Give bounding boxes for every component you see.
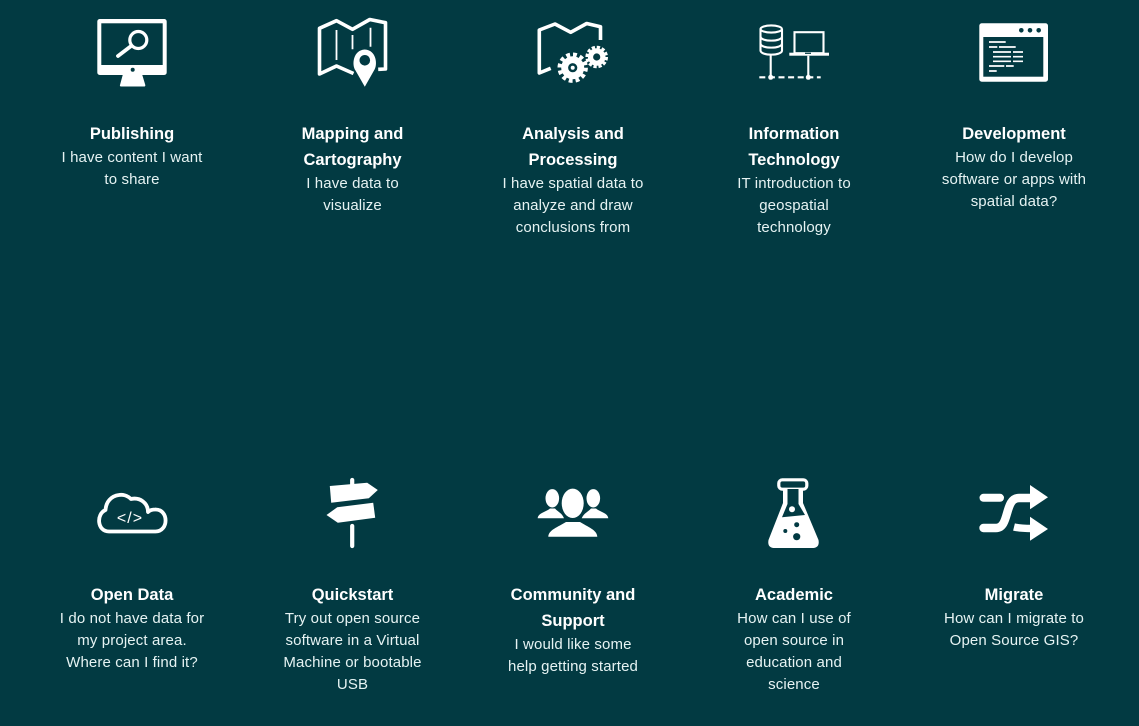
panel: Analysis and Processing	[502, 22, 644, 236]
text: Quickstart: Try out open source	[285, 610, 420, 627]
text: Development: Development	[962, 125, 1066, 143]
text: Analysis and Processing: I have spatial data to	[502, 175, 644, 192]
icon: map with gears	[538, 22, 608, 83]
text: Community and Support: I would like some	[514, 636, 632, 653]
panel: Community and Support	[508, 488, 638, 675]
icon: lab flask	[768, 478, 819, 548]
icon: crossing arrows	[979, 485, 1048, 541]
text: Information Technology: Information	[749, 125, 839, 143]
text: Quickstart: Machine or bootable	[283, 654, 422, 671]
text: Community and Support: help getting started	[508, 658, 638, 675]
panel: Migrate	[944, 485, 1084, 649]
text: Information Technology: geospatial	[759, 197, 829, 214]
text: Information Technology: IT introduction to	[737, 175, 851, 192]
text: Academic	[737, 586, 851, 693]
text: Quickstart	[283, 586, 422, 693]
panel: Development	[942, 23, 1086, 210]
text: Open Data: my project area.	[77, 632, 187, 649]
text: Mapping and Cartography: visualize	[323, 197, 382, 214]
text: Mapping and Cartography: Cartography	[303, 151, 402, 169]
text: Community and Support	[508, 586, 638, 675]
panel: Mapping and Cartography	[302, 18, 403, 214]
text: Publishing: to share	[104, 171, 160, 188]
panel: Open Data	[60, 492, 204, 671]
text: Open Data	[60, 586, 204, 671]
text: Information Technology: Technology	[748, 151, 840, 169]
text: Analysis and Processing: Analysis and	[522, 125, 624, 143]
text: Open Data: Where can I find it?	[66, 654, 198, 671]
icon: cloud with code	[97, 492, 168, 534]
panel: Academic	[737, 478, 851, 693]
text: Publishing: I have content I want	[62, 149, 202, 166]
text: Academic: open source in	[744, 632, 844, 649]
text: Mapping and Cartography: Mapping and	[302, 125, 403, 143]
icon: database and laptop network	[759, 24, 829, 80]
text: Analysis and Processing: analyze and draw	[513, 197, 633, 214]
icon: cloud with code: </>	[117, 510, 143, 527]
text: Migrate	[944, 586, 1084, 649]
text: Academic: science	[768, 676, 820, 693]
text: Mapping and Cartography: I have data to	[306, 175, 399, 192]
text: Migrate: Migrate	[985, 586, 1043, 604]
text: Analysis and Processing: Processing	[529, 151, 617, 169]
text: Academic: How can I use of	[737, 610, 851, 627]
text: Open Data: I do not have data for	[60, 610, 204, 627]
icon: signpost	[326, 478, 378, 548]
text: Academic: education and	[746, 654, 842, 671]
text: Mapping and Cartography	[302, 125, 403, 214]
text: Academic: Academic	[755, 586, 833, 604]
icon: group of people	[538, 488, 608, 537]
text: Development: How do I develop	[955, 149, 1073, 166]
text: Analysis and Processing	[502, 125, 644, 236]
panel: Publishing	[62, 19, 202, 188]
text: Development: spatial data?	[971, 193, 1057, 210]
icon: monitor with magnifier	[97, 19, 167, 86]
text: Information Technology	[737, 125, 851, 236]
icon: code window	[979, 23, 1048, 82]
panel: Information Technology	[737, 24, 851, 236]
text: Open Data: Open Data	[91, 586, 173, 604]
text: Migrate: How can I migrate to	[944, 610, 1084, 627]
icon: folded map with pin	[318, 18, 388, 87]
text: Community and Support: Community and	[511, 586, 635, 604]
text: Quickstart: Quickstart	[312, 586, 393, 604]
text: Analysis and Processing: conclusions from	[516, 219, 630, 236]
panel: Quickstart	[283, 478, 422, 693]
text: Information Technology: technology	[757, 219, 831, 236]
text: Development: software or apps with	[942, 171, 1086, 188]
text: Quickstart: USB	[337, 676, 368, 693]
text: Publishing: Publishing	[90, 125, 174, 143]
text: Quickstart: software in a Virtual	[286, 632, 419, 649]
text: Community and Support: Support	[541, 612, 605, 630]
text: Publishing	[62, 125, 202, 188]
text: Development	[942, 125, 1086, 210]
text: Migrate: Open Source GIS?	[950, 632, 1078, 649]
